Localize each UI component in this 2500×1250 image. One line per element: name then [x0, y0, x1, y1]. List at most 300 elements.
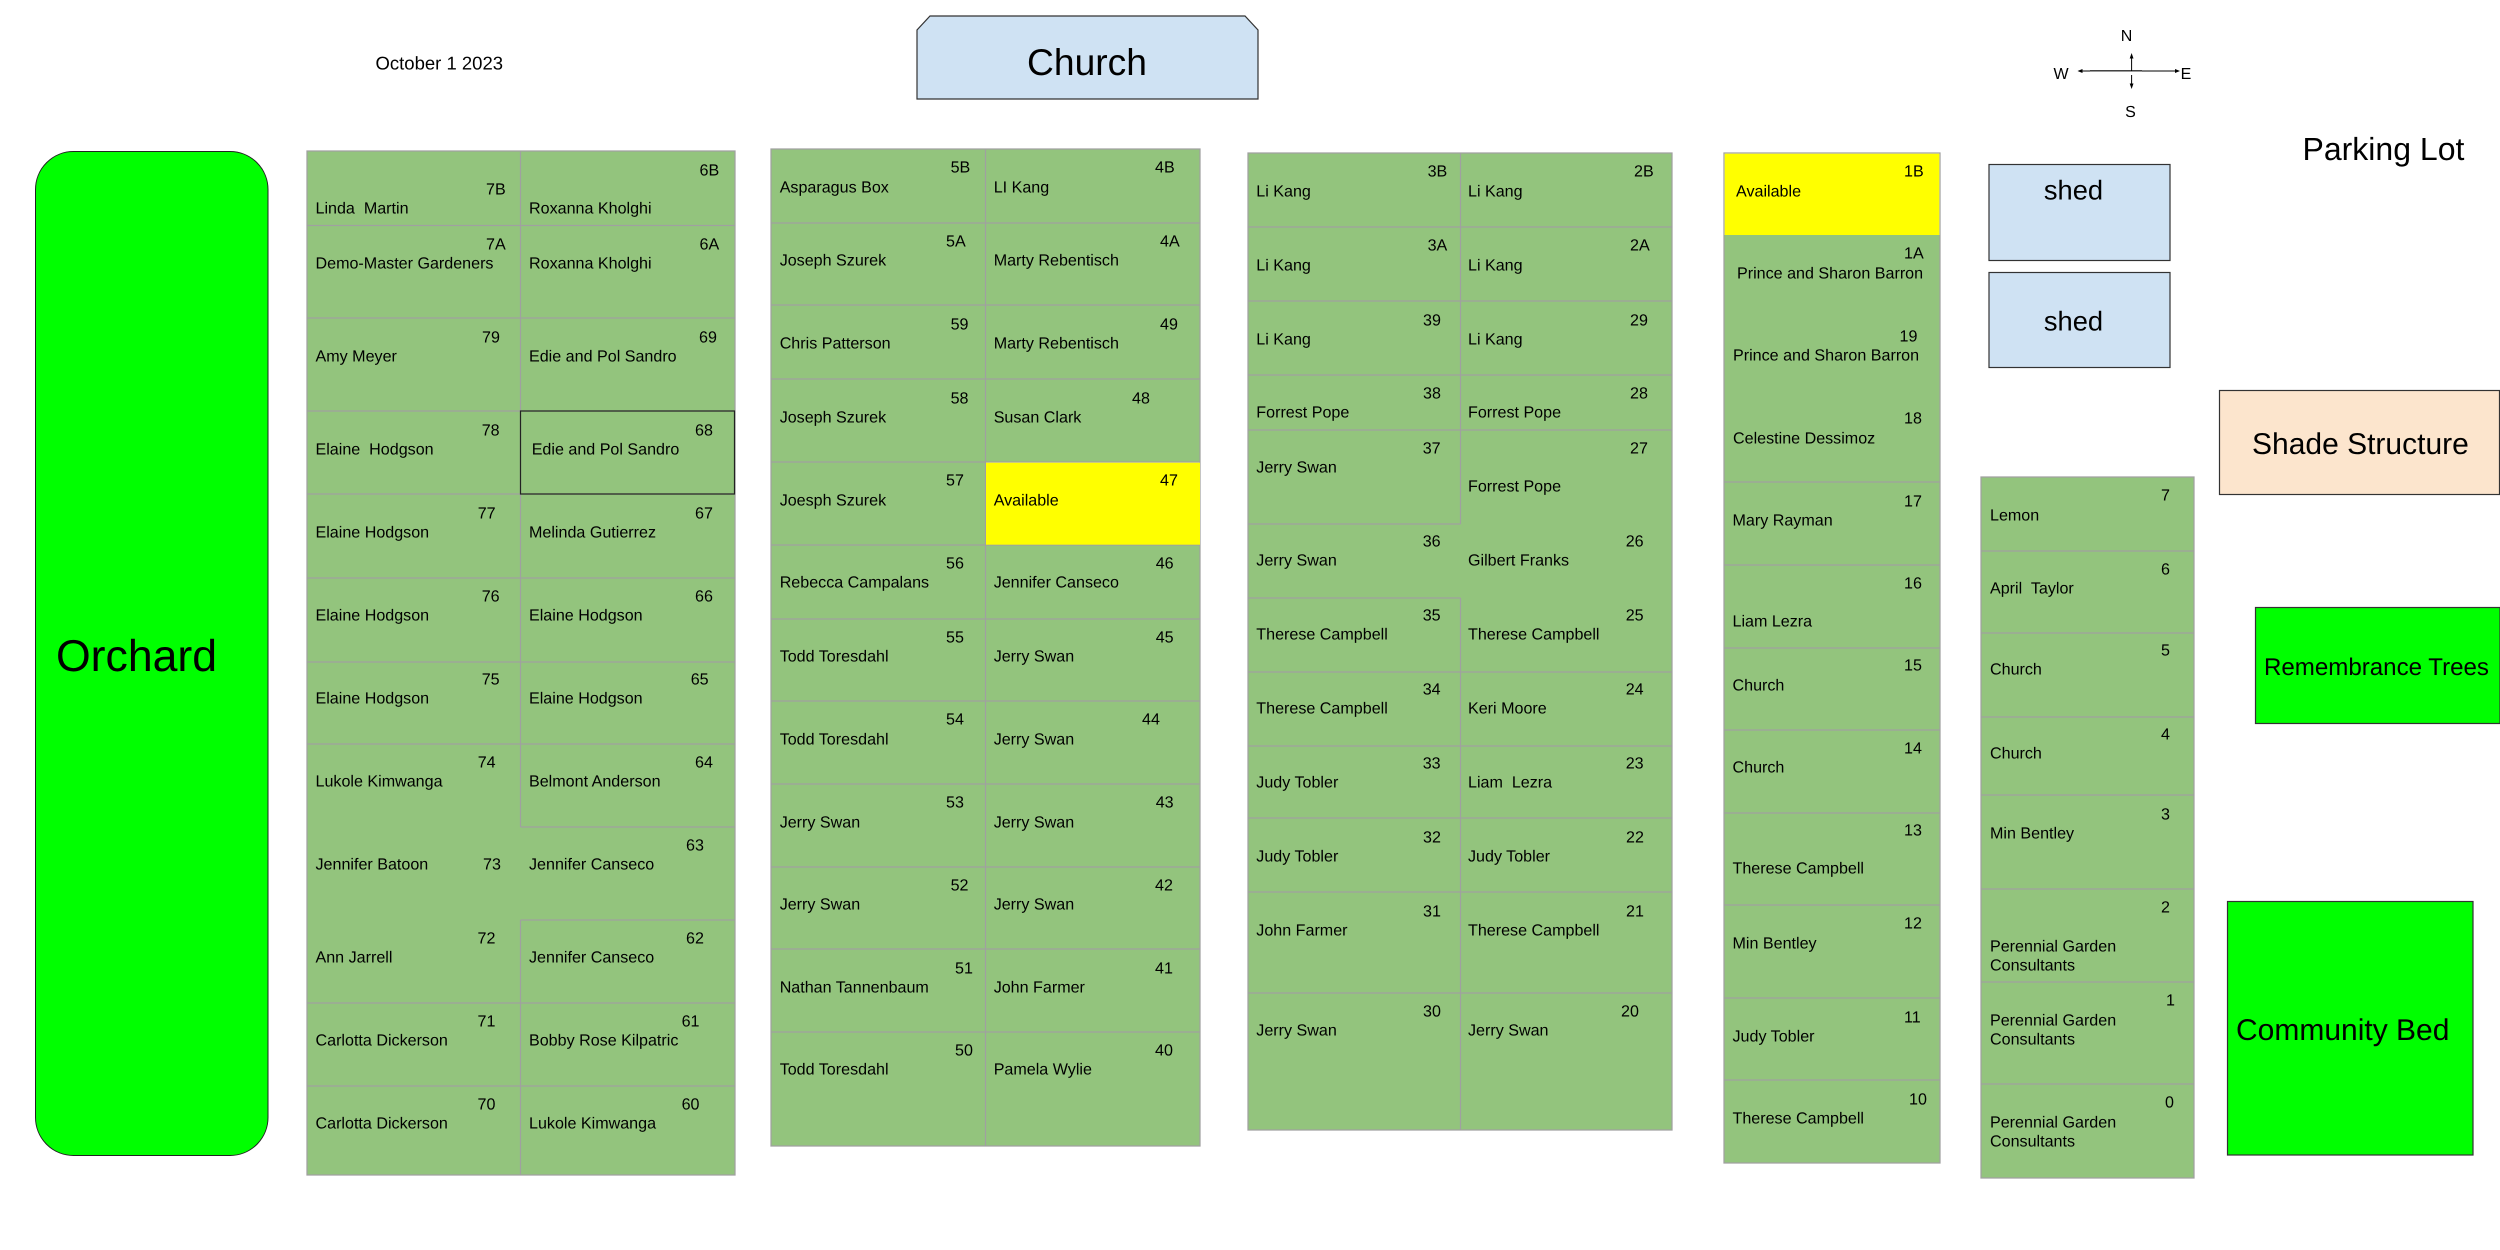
plot 62 [520, 920, 735, 1003]
plot 66 [520, 578, 735, 662]
plot 22 [1460, 818, 1672, 892]
plot 36: 36 [1423, 532, 1441, 550]
shed 2: shed [2044, 306, 2103, 336]
plot 30: Jerry Swan [1256, 1021, 1337, 1039]
plot 4B: LI Kang [994, 178, 1049, 196]
plot 1B: available: 1B [1904, 162, 1924, 180]
plot 58 [771, 379, 986, 462]
plot 5: 5 [2161, 641, 2170, 659]
plot 66: 66 [695, 587, 713, 605]
plot 6B: 6B [700, 161, 719, 179]
plot 56 [771, 545, 986, 619]
plot 79 [307, 318, 520, 411]
plot 5A [771, 223, 986, 305]
plot 53 [771, 784, 986, 867]
plot 34: Therese Campbell [1256, 699, 1388, 717]
plot 3B [1248, 153, 1460, 227]
shed 1: shed [2044, 174, 2103, 206]
plot 14: Church [1732, 758, 1784, 776]
remembrance trees: Remembrance Trees [2264, 654, 2489, 681]
plot 60 [520, 1086, 735, 1175]
plot 19: Prince and Sharon Barron [1733, 346, 1919, 364]
plot 4A: 4A [1160, 232, 1180, 250]
plot 72: 72 [478, 929, 495, 947]
plot 1A [1724, 235, 1940, 318]
plot 3: Min Bentley [1990, 824, 2075, 842]
plot 36 [1248, 524, 1460, 598]
plot 3B: 3B [1428, 162, 1447, 180]
plot 44: 44 [1142, 710, 1160, 728]
plot 76 [307, 578, 520, 662]
plot 76: 76 [482, 587, 500, 605]
plot 2: Perennial Garden [1990, 937, 2116, 955]
plot 17 [1724, 482, 1940, 565]
plot 65 [520, 662, 735, 744]
plot 3 [1981, 795, 2194, 889]
plot 1B: available: Available [1736, 182, 1801, 200]
plot 37: 37 [1423, 439, 1441, 457]
plot 48: Susan Clark [994, 408, 1082, 426]
plot 38: Forrest Pope [1256, 403, 1349, 421]
panel: beds 10-19 [1724, 153, 1940, 1163]
plot 69: 69 [699, 328, 717, 346]
plot 77 [307, 494, 520, 578]
plot 47: available: Available [994, 491, 1059, 509]
plot 73: 73 [483, 855, 501, 873]
plot 71: Carlotta Dickerson [316, 1031, 448, 1049]
plot 30 [1248, 993, 1460, 1130]
panel: beds 20-39 [1248, 153, 1672, 1130]
plot 3B: Li Kang [1256, 182, 1311, 200]
plot 41 [986, 949, 1200, 1032]
plot 0: Consultants [1990, 1132, 2075, 1150]
compass: E [2181, 66, 2191, 83]
plot 18 [1724, 400, 1940, 482]
plot 18: 18 [1904, 409, 1922, 427]
plot 26: 26 [1626, 532, 1644, 550]
plot 16 [1724, 565, 1940, 648]
plot 51: Nathan Tannenbaum [780, 978, 929, 996]
plot 31: 31 [1423, 902, 1441, 920]
orchard: Orchard [56, 632, 217, 681]
plot 61 [520, 1003, 735, 1086]
label: parking lot: Parking Lot [2302, 131, 2464, 167]
plot 35: Therese Campbell [1256, 625, 1388, 643]
plot 59: Chris Patterson [780, 334, 891, 352]
plot 43: Jerry Swan [994, 813, 1074, 831]
plot 48: 48 [1132, 389, 1150, 407]
plot 43 [986, 784, 1200, 867]
plot 24 [1460, 672, 1672, 746]
compass: S [2125, 104, 2136, 121]
plot 65: 65 [691, 670, 709, 688]
plot 2A [1460, 227, 1672, 301]
plot 31: John Farmer [1256, 921, 1348, 939]
plot 6B [520, 151, 735, 226]
plot 24: 24 [1626, 680, 1644, 698]
orchard [36, 152, 268, 1156]
plot 44 [986, 701, 1200, 784]
plot 37: Jerry Swan [1256, 458, 1337, 476]
plot 11 [1724, 998, 1940, 1080]
plot 6A: 6A [700, 235, 719, 253]
plot 62: 62 [686, 929, 704, 947]
plot 34 [1248, 672, 1460, 746]
plot 1A: 1A [1904, 244, 1924, 262]
plot 4: 4 [2161, 725, 2170, 743]
plot 46 [986, 545, 1200, 619]
date label: October 1 2023 [376, 52, 503, 74]
plot 15 [1724, 648, 1940, 730]
plot 72 [307, 920, 520, 1003]
plot 33 [1248, 746, 1460, 818]
plot 59 [771, 305, 986, 379]
plot 11: 11 [1904, 1008, 1921, 1026]
shade structure [2220, 390, 2500, 494]
plot 0 [1981, 1084, 2194, 1178]
plot 25: 25 [1626, 606, 1644, 624]
plot 7: Lemon [1990, 506, 2039, 524]
plot 57 [771, 462, 986, 545]
plot 40: 40 [1155, 1041, 1173, 1059]
plot 1: 1 [2166, 991, 2175, 1009]
plot 29: Li Kang [1468, 330, 1523, 348]
plot 5A: 5A [946, 232, 966, 250]
plot 10: Therese Campbell [1732, 1109, 1864, 1127]
plot 12 [1724, 905, 1940, 998]
plot 15: 15 [1904, 656, 1922, 674]
plot 13: 13 [1904, 821, 1922, 839]
plot 64 [520, 744, 735, 827]
plot 79: 79 [482, 328, 500, 346]
plot 20: 20 [1621, 1002, 1639, 1020]
plot 40 [986, 1032, 1200, 1146]
plot 7: 7 [2161, 486, 2170, 504]
plot 60: 60 [682, 1095, 700, 1113]
plot 5B: Asparagus Box [780, 178, 889, 196]
plot 70: 70 [478, 1095, 495, 1113]
plot 77: 77 [478, 504, 496, 522]
plot 32: Judy Tobler [1256, 847, 1339, 865]
plot 51: 51 [955, 959, 973, 977]
plot 52 [771, 867, 986, 949]
plot 4: Church [1990, 744, 2042, 762]
plot 2A: Li Kang [1468, 256, 1523, 274]
plot 27: 27 [1630, 439, 1648, 457]
plot 21: Therese Campbell [1468, 921, 1600, 939]
plot 7B [307, 151, 520, 226]
plot 55: 55 [946, 628, 964, 646]
plot 75: Elaine Hodgson [316, 689, 429, 707]
plot 20 [1460, 993, 1672, 1130]
plot 78: Elaine Hodgson [316, 440, 434, 458]
panel: beds 60-79 [307, 151, 735, 1175]
plot 1A: Prince and Sharon Barron [1737, 264, 1923, 282]
plot 31 [1248, 892, 1460, 993]
plot 59: 59 [951, 315, 969, 333]
plot 69: Edie and Pol Sandro [529, 347, 677, 365]
plot 2B: 2B [1634, 162, 1654, 180]
plot 42: 42 [1155, 876, 1173, 894]
plot 74: 74 [478, 753, 496, 771]
plot 78 [307, 411, 520, 494]
plot 67 [520, 494, 735, 578]
plot 5A: Joseph Szurek [780, 251, 887, 269]
plot 20: Jerry Swan [1468, 1021, 1548, 1039]
plot 14 [1724, 730, 1940, 813]
plot 38: 38 [1423, 384, 1441, 402]
plot 4B: 4B [1155, 158, 1175, 176]
plot 5: Church [1990, 660, 2042, 678]
plot 7B: Linda Martin [316, 199, 409, 217]
plot 54 [771, 701, 986, 784]
plot 75 [307, 662, 520, 744]
plot 53: 53 [946, 793, 964, 811]
plot 4A [986, 223, 1200, 305]
plot 32 [1248, 818, 1460, 892]
plot 33: Judy Tobler [1256, 773, 1339, 791]
plot 6A: Roxanna Kholghi [529, 254, 652, 272]
panel: beds 0-7 [1981, 477, 2194, 1178]
plot 35 [1248, 598, 1460, 672]
shed 2 [1989, 272, 2170, 368]
plot 48 [986, 379, 1200, 462]
plot 79: Amy Meyer [316, 347, 398, 365]
plot 2B: Li Kang [1468, 182, 1523, 200]
plot 45 [986, 619, 1200, 701]
plot 7A: 7A [486, 235, 506, 253]
plot 63 [520, 827, 735, 920]
plot 52: 52 [951, 876, 969, 894]
plot 41: John Farmer [994, 978, 1086, 996]
plot 23: Liam Lezra [1468, 773, 1552, 791]
plot 6B: Roxanna Kholghi [529, 199, 652, 217]
plot 7A: Demo-Master Gardeners [316, 254, 493, 272]
plot 5 [1981, 633, 2194, 717]
plot 74 [307, 744, 520, 827]
plot 0: 0 [2165, 1093, 2174, 1111]
plot 39: 39 [1423, 311, 1441, 329]
plot 1: Consultants [1990, 1030, 2075, 1048]
plot 4B [986, 149, 1200, 223]
plot 2: Consultants [1990, 956, 2075, 974]
plot 78: 78 [482, 421, 500, 439]
plot 6: 6 [2161, 560, 2170, 578]
plot 64: Belmont Anderson [529, 772, 661, 790]
plot 47: available: 47 [1160, 471, 1178, 489]
plot 3A: Li Kang [1256, 256, 1311, 274]
plot 39 [1248, 301, 1460, 375]
plot 13 [1724, 813, 1940, 905]
plot 10 [1724, 1080, 1940, 1163]
plot 71: 71 [478, 1012, 495, 1030]
plot 25 [1460, 598, 1672, 672]
plot 23 [1460, 746, 1672, 818]
plot 21 [1460, 892, 1672, 993]
plot 68: Edie and Pol Sandro [532, 440, 679, 458]
shed 1 [1989, 164, 2170, 260]
plot 70 [307, 1086, 520, 1175]
plot 33: 33 [1423, 754, 1441, 772]
plot 58: 58 [951, 389, 969, 407]
plot 19 [1724, 318, 1940, 400]
plot 14: 14 [1904, 739, 1922, 757]
plot 6A [520, 226, 735, 318]
plot 72: Ann Jarrell [316, 948, 392, 966]
plot 76: Elaine Hodgson [316, 606, 429, 624]
plot 1B: available [1725, 154, 1939, 235]
plot 19: 19 [1900, 327, 1917, 345]
plot 74: Lukole Kimwanga [316, 772, 443, 790]
plot 38 [1248, 375, 1460, 430]
plot 63: 63 [686, 836, 704, 854]
plot 16: 16 [1904, 574, 1922, 592]
plot 22: 22 [1626, 828, 1644, 846]
plot 7 [1981, 477, 2194, 551]
plot 36: Jerry Swan [1256, 551, 1337, 569]
plot 44: Jerry Swan [994, 730, 1074, 748]
plot 4 [1981, 717, 2194, 795]
plot 39: Li Kang [1256, 330, 1311, 348]
plot 69 [520, 318, 735, 411]
plot 68: 68 [695, 421, 713, 439]
plot 29: 29 [1630, 311, 1648, 329]
plot 51 [771, 949, 986, 1032]
plot 57: Joesph Szurek [780, 491, 887, 509]
plot 37 [1248, 430, 1460, 524]
plot 6 [1981, 551, 2194, 633]
plot 52: Jerry Swan [780, 895, 860, 913]
plot 21: 21 [1626, 902, 1644, 920]
compass: W [2053, 66, 2069, 83]
plot 34: 34 [1423, 680, 1441, 698]
panel: beds 40-59 [771, 149, 1200, 1146]
plot 54: 54 [946, 710, 964, 728]
plot 0: Perennial Garden [1990, 1113, 2116, 1131]
plot 45: 45 [1156, 628, 1174, 646]
plot 2B [1460, 153, 1672, 227]
plot 40: Pamela Wylie [994, 1060, 1092, 1078]
plot 65: Elaine Hodgson [529, 689, 643, 707]
community bed [2228, 902, 2473, 1155]
plot 12: 12 [1904, 914, 1922, 932]
plot 29 [1460, 301, 1672, 375]
plot 70: Carlotta Dickerson [316, 1114, 448, 1132]
plot 67: 67 [695, 504, 713, 522]
plot 23: 23 [1626, 754, 1644, 772]
plot 3: 3 [2161, 805, 2170, 823]
plot 49: Marty Rebentisch [994, 334, 1119, 352]
plot 49: 49 [1160, 315, 1178, 333]
plot 26 [1460, 524, 1672, 598]
plot 50: 50 [955, 1041, 973, 1059]
plot 2A: 2A [1630, 236, 1650, 254]
plot 50 [771, 1032, 986, 1146]
plot 18: Celestine Dessimoz [1733, 429, 1875, 447]
plot 27 [1460, 430, 1672, 524]
plot 2: 2 [2161, 898, 2170, 916]
plot 3A [1248, 227, 1460, 301]
plot 53: Jerry Swan [780, 813, 860, 831]
plot 50: Todd Toresdahl [780, 1060, 889, 1078]
plot 7B: 7B [486, 180, 506, 198]
plot 11: Judy Tobler [1732, 1027, 1815, 1045]
compass [2053, 28, 2191, 121]
plot 27: Forrest Pope [1468, 477, 1561, 495]
plot 46: Jennifer Canseco [994, 573, 1119, 591]
plot 55 [771, 619, 986, 701]
plot 77: Elaine Hodgson [316, 523, 429, 541]
plot 60: Lukole Kimwanga [529, 1114, 656, 1132]
plot 28: Forrest Pope [1468, 403, 1561, 421]
plot 15: Church [1732, 676, 1784, 694]
plot 17: 17 [1904, 492, 1922, 510]
plot 64: 64 [695, 753, 713, 771]
plot 47: available [986, 463, 1200, 545]
plot 28: 28 [1630, 384, 1648, 402]
plot 30: 30 [1423, 1002, 1441, 1020]
plot 5B [771, 149, 986, 223]
plot 45: Jerry Swan [994, 647, 1074, 665]
plot 61: 61 [682, 1012, 700, 1030]
plot 16: Liam Lezra [1732, 612, 1812, 630]
plot 12: Min Bentley [1732, 934, 1818, 952]
plot 10: 10 [1909, 1090, 1927, 1108]
plot 54: Todd Toresdahl [780, 730, 889, 748]
plot 73: Jennifer Batoon [316, 855, 428, 873]
plot 61: Bobby Rose Kilpatric [529, 1031, 678, 1049]
compass: N [2121, 28, 2132, 45]
building: church: Church [1027, 41, 1147, 83]
plot 3A: 3A [1428, 236, 1448, 254]
plot 66: Elaine Hodgson [529, 606, 643, 624]
shade structure: Shade Structure [2252, 428, 2469, 461]
plot 5B: 5B [951, 158, 970, 176]
plot 63: Jennifer Canseco [529, 855, 654, 873]
remembrance trees [2256, 608, 2500, 724]
plot 17: Mary Rayman [1732, 511, 1833, 529]
building: church [917, 16, 1258, 99]
plot 2 [1981, 889, 2194, 982]
plot 55: Todd Toresdahl [780, 647, 889, 665]
plot 42 [986, 867, 1200, 949]
plot 62: Jennifer Canseco [529, 948, 654, 966]
plot 43: 43 [1156, 793, 1174, 811]
plot 35: 35 [1423, 606, 1441, 624]
plot 49 [986, 305, 1200, 379]
community bed: Community Bed [2236, 1014, 2449, 1047]
plot 56: 56 [946, 554, 964, 572]
plot 25: Therese Campbell [1468, 625, 1600, 643]
plot 42: Jerry Swan [994, 895, 1074, 913]
plot 24: Keri Moore [1468, 699, 1547, 717]
plot 71 [307, 1003, 520, 1086]
plot 56: Rebecca Campalans [780, 573, 929, 591]
plot 41: 41 [1155, 959, 1173, 977]
plot 73 [307, 827, 520, 920]
plot 1: Perennial Garden [1990, 1011, 2116, 1029]
plot 57: 57 [946, 471, 964, 489]
plot 67: Melinda Gutierrez [529, 523, 656, 541]
plot 4A: Marty Rebentisch [994, 251, 1119, 269]
plot 22: Judy Tobler [1468, 847, 1551, 865]
plot 32: 32 [1423, 828, 1441, 846]
plot 1 [1981, 982, 2194, 1084]
plot 46: 46 [1156, 554, 1174, 572]
plot 26: Gilbert Franks [1468, 551, 1569, 569]
plot 68 [520, 411, 735, 494]
plot 13: Therese Campbell [1732, 859, 1864, 877]
